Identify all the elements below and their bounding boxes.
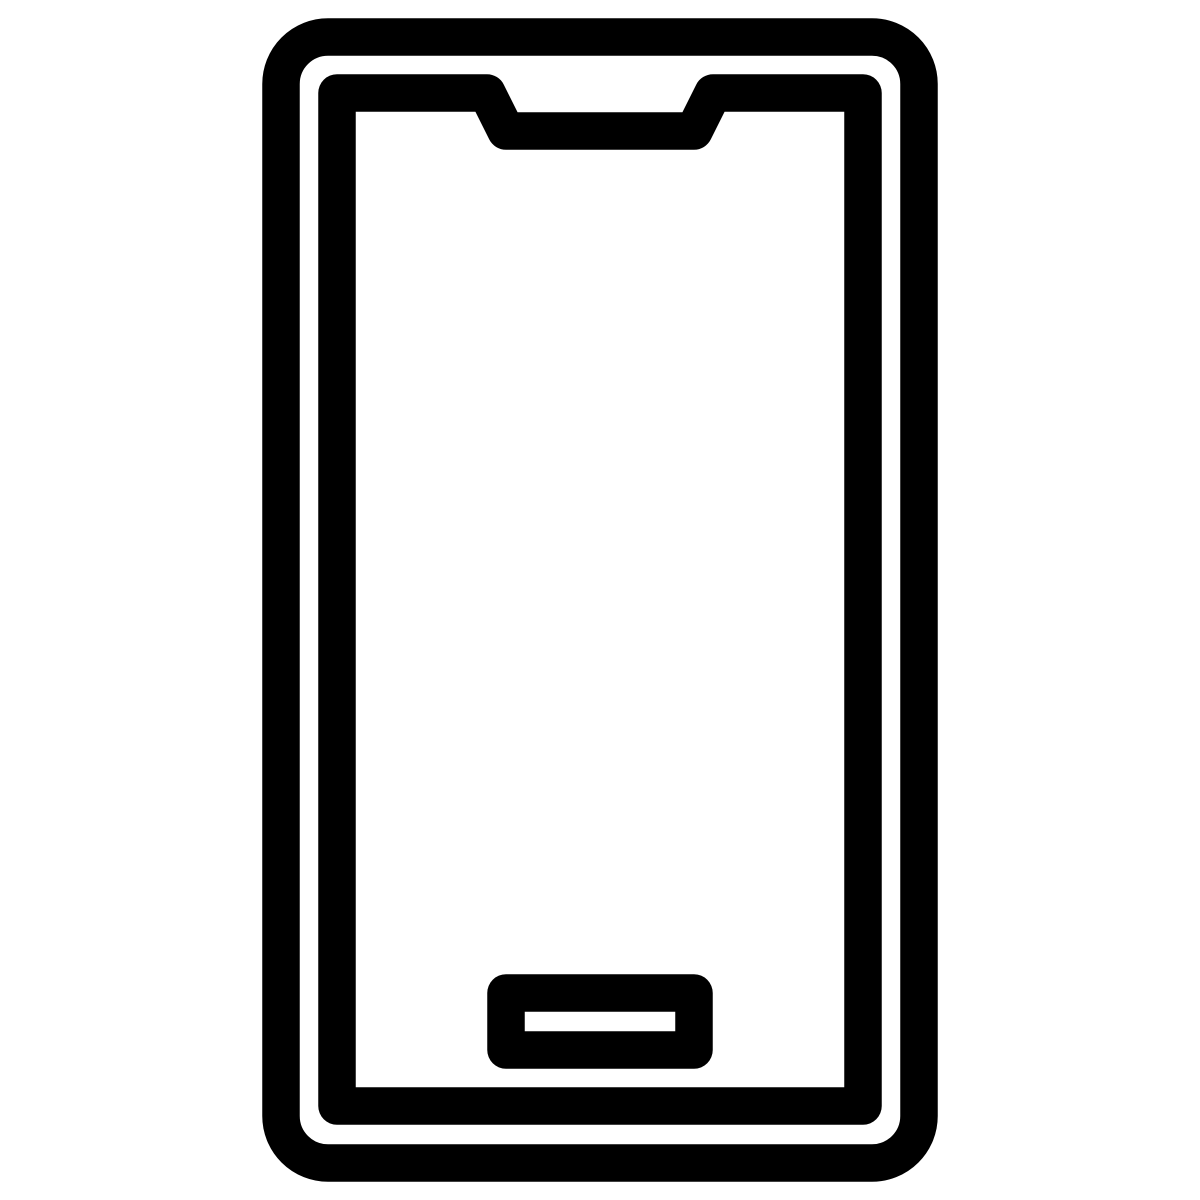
screen with notch <box>337 93 863 1106</box>
home button <box>506 993 694 1050</box>
phone body outline <box>281 37 919 1163</box>
